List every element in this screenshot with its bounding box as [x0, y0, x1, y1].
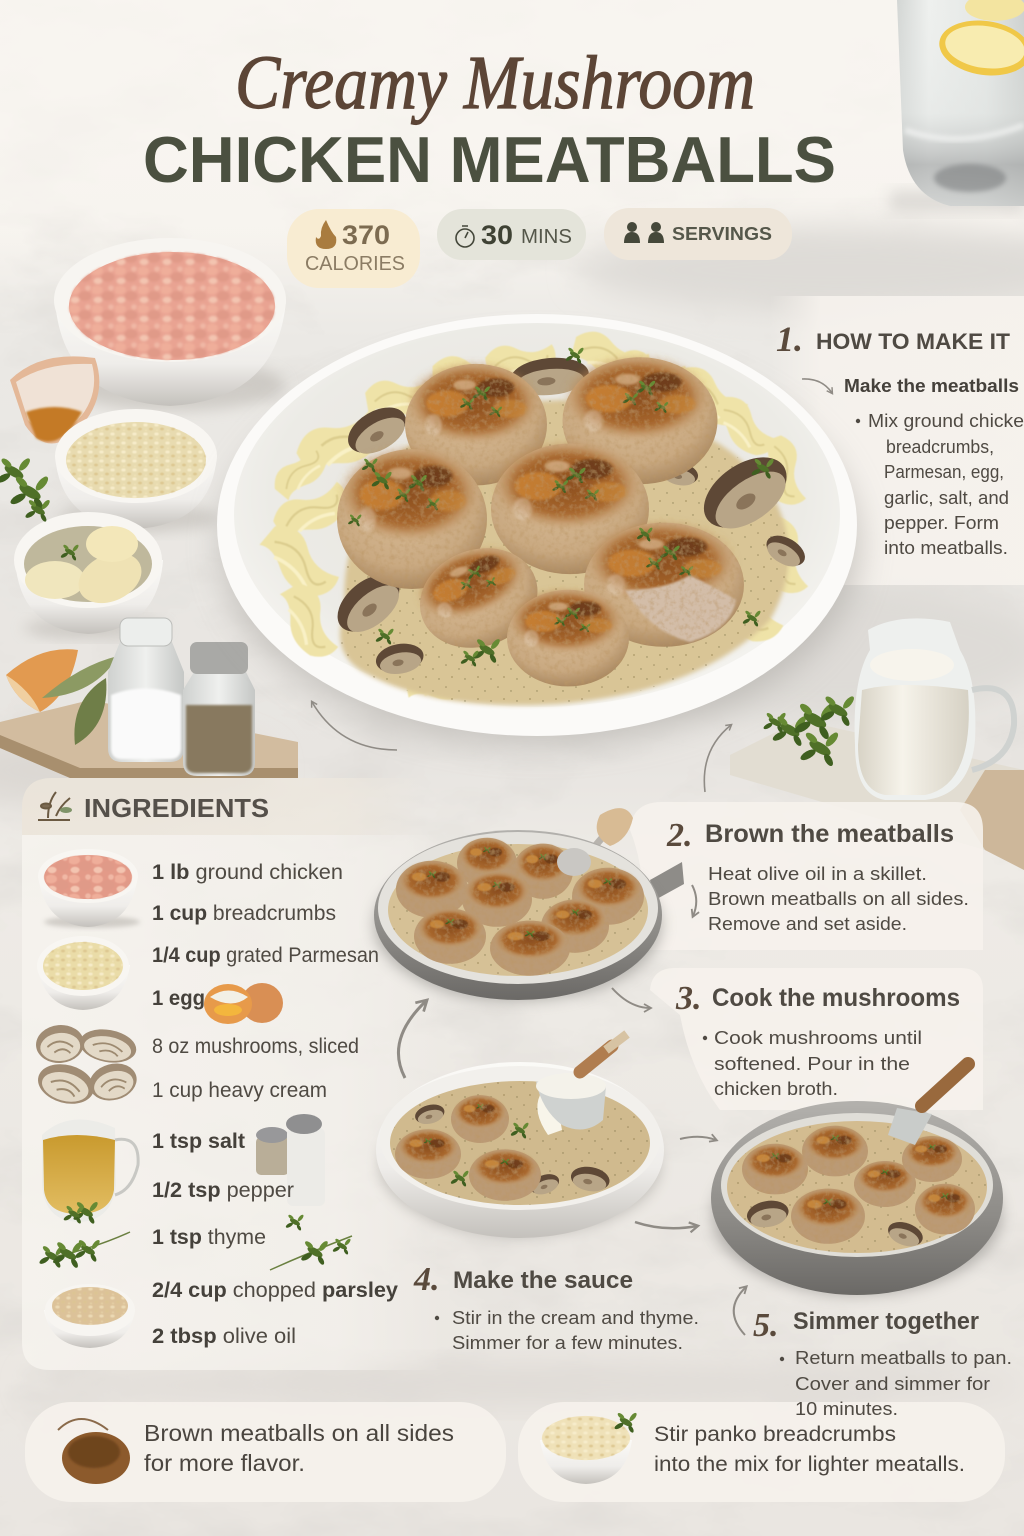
panel: ingredients: [22, 778, 440, 1370]
tip: brown meatballs: Brown meatballs on all sides: [144, 1420, 454, 1446]
ingredient list: 8 oz mushrooms, sliced: [152, 1035, 359, 1058]
pepper jar: [183, 672, 255, 776]
stat pill: calories: [287, 209, 420, 288]
bowl: ground chicken: [54, 238, 286, 411]
icon: salt and pepper shakers: [256, 1114, 325, 1206]
step 2 text: [666, 817, 969, 934]
meatball cut face: [625, 575, 736, 642]
step arrows: [398, 885, 746, 1335]
step 3 text: [675, 980, 960, 1099]
how to make it text: Make the meatballs: [844, 376, 1019, 396]
title script line: Creamy Mushroom: [235, 41, 755, 125]
how to make it text: breadcrumbs,: [886, 437, 994, 457]
step 5 text: [753, 1307, 1012, 1419]
step 2 text: Brown the meatballs: [705, 820, 954, 848]
bowl: garlic cloves: [14, 512, 167, 638]
wedge of cheese: [6, 649, 78, 712]
drinking glass with lemon: [890, 0, 1024, 212]
step 4 text: 4.: [413, 1261, 440, 1298]
step 4 text: Simmer for a few minutes.: [452, 1333, 683, 1353]
ingredient list: 1 cup breadcrumbs: [152, 902, 336, 925]
step 4 text: Stir in the cream and thyme.: [452, 1308, 699, 1328]
spoon handle: [585, 826, 612, 858]
skillet: browned meatballs: [374, 808, 684, 1001]
panel: step 3: [650, 968, 983, 1110]
pour of cream: [537, 1095, 562, 1135]
stat pill: servings: [604, 208, 792, 260]
cream sauce: [340, 400, 789, 705]
step 4 text: [413, 1261, 699, 1353]
step 5 text: 10 minutes.: [795, 1399, 898, 1419]
panel: step 2: [630, 802, 983, 950]
icon: breadcrumbs bowl: [37, 936, 130, 1010]
panel: how to make it: [770, 296, 1024, 585]
how to make it text: garlic, salt, and: [884, 488, 1009, 508]
plate: [217, 314, 857, 736]
step 5 text: 5.: [753, 1307, 778, 1344]
stat pill: time: 30: [481, 220, 513, 250]
stat pill: time: [437, 209, 586, 260]
meatballs: [337, 355, 744, 686]
pouring cup: [536, 1077, 606, 1129]
ingredients heading: INGREDIENTS: [84, 793, 269, 823]
how to make it text: [776, 319, 1024, 558]
step 3 text: Cook the mushrooms: [712, 984, 960, 1012]
stat pill: calories: CALORIES: [305, 253, 405, 275]
ingredient list: 2/4 cup chopped parsley: [152, 1279, 398, 1302]
ingredient list: [152, 861, 398, 1348]
cutting board with salt and pepper jars: [0, 618, 298, 778]
icon: browned meatball: [58, 1419, 130, 1484]
bowl: breadcrumbs: [55, 409, 220, 532]
icon: broken egg: [204, 983, 283, 1024]
ingredient list: 1/2 tsp pepper: [152, 1179, 294, 1202]
icon: sliced mushrooms: [34, 1023, 141, 1110]
noodles: [253, 327, 816, 707]
how to make it text: 1.: [776, 319, 803, 359]
decorative arrows around plate: [312, 379, 832, 792]
icon: jug of broth: [42, 1119, 138, 1225]
mushroom slices: [327, 355, 810, 678]
icon: thyme sprig: [38, 1232, 130, 1269]
step 2 text: Heat olive oil in a skillet.: [708, 863, 927, 884]
tip: brown meatballs: [25, 1402, 506, 1502]
spoon bowl: [557, 848, 591, 876]
plate shadow: [220, 345, 860, 745]
step 5 text: Simmer together: [793, 1308, 979, 1335]
tip: panko breadcrumbs: [518, 1402, 1005, 1502]
herb sprig left: [0, 457, 51, 523]
step 5 text: Cover and simmer for: [795, 1374, 990, 1394]
tip: panko breadcrumbs: Stir panko breadcrumbs: [654, 1423, 896, 1446]
icon: stopwatch: [456, 226, 474, 247]
step 3 text: 3.: [675, 980, 702, 1017]
ingredients header: [22, 778, 425, 835]
tip: brown meatballs: for more flavor.: [144, 1450, 305, 1476]
step 2 text: 2.: [666, 817, 692, 854]
step 3 text: Cook mushrooms until: [714, 1027, 922, 1048]
how to make it text: into meatballs.: [884, 538, 1008, 558]
stat pill: calories: 370: [342, 220, 390, 250]
spatula: [888, 1108, 932, 1145]
title: [143, 41, 836, 196]
icon: herb sprigs: [270, 1214, 352, 1270]
ingredient list: 1 lb ground chicken: [152, 861, 343, 884]
icon: panko bowl: [540, 1412, 638, 1484]
step 5 text: Return meatballs to pan.: [795, 1348, 1012, 1368]
cracked egg shell: [10, 356, 99, 444]
step 2 text: Brown meatballs on all sides.: [708, 888, 969, 909]
step 4 text: Make the sauce: [453, 1267, 633, 1294]
ingredient list: 1/4 cup grated Parmesan: [152, 944, 379, 967]
parsley flecks: [348, 347, 775, 667]
salt jar: [108, 642, 184, 762]
stat pill: servings: SERVINGS: [672, 223, 772, 244]
how to make it text: pepper. Form: [884, 513, 999, 533]
tip: panko breadcrumbs: into the mix for lighter meatalls.: [654, 1453, 965, 1476]
ingredient list: 1 tsp thyme: [152, 1226, 266, 1249]
ingredient list: 1 cup heavy cream: [152, 1079, 327, 1102]
icon: herb sprig: [38, 792, 72, 820]
icon: oat bowl: [44, 1284, 135, 1348]
icon: flame: [316, 220, 336, 249]
stat pill: time: MINS: [521, 226, 572, 248]
skillet: simmering meatballs: [711, 1064, 1003, 1295]
ingredients body: [22, 835, 440, 1370]
how to make it text: Parmesan, egg,: [884, 462, 1004, 482]
ingredient list: 2 tbsp olive oil: [152, 1325, 296, 1348]
pan: cream sauce with pouring cup: [376, 1034, 664, 1238]
ingredient list: 1 tsp salt: [152, 1130, 245, 1153]
main plate of meatballs: [217, 314, 860, 745]
bay leaves: [42, 656, 118, 698]
icon: ground chicken bowl: [38, 849, 140, 928]
step 3 text: chicken broth.: [714, 1078, 838, 1099]
cream jug on board with parsley: [730, 618, 1024, 870]
ingredient list: 1 egg: [152, 987, 205, 1010]
step 3 text: softened. Pour in the: [714, 1053, 910, 1074]
icon: people: [624, 222, 664, 243]
step 2 text: Remove and set aside.: [708, 913, 907, 934]
how to make it text: Mix ground chicke: [868, 411, 1024, 431]
title bold line: CHICKEN MEATBALLS: [143, 123, 836, 196]
how to make it text: HOW TO MAKE IT: [816, 329, 1011, 354]
